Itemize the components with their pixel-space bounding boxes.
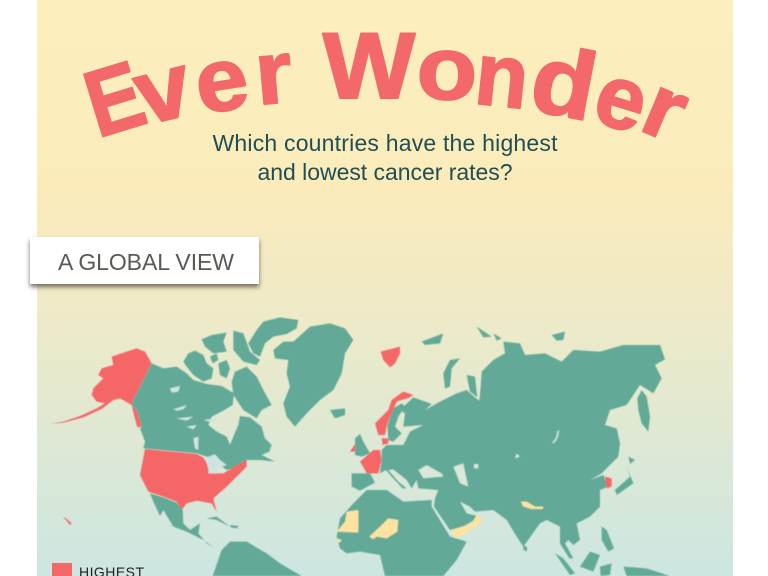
title: Ever Wonder arched letters: e — [584, 43, 660, 152]
Kamchatka peninsula — [637, 390, 650, 432]
Japan — [615, 457, 635, 495]
title: Ever Wonder arched letters: E — [73, 41, 156, 157]
Canada — [132, 363, 275, 470]
Norway — [375, 392, 413, 435]
Arctic islands — [183, 317, 298, 418]
section label: A Global View: A GLOBAL VIEW — [58, 249, 234, 275]
map: Eurasia and Africa — [337, 327, 670, 576]
map: Americas — [50, 317, 375, 576]
Southeast Asia islands — [523, 527, 670, 576]
Caribbean islands — [207, 517, 238, 528]
subtitle — [212, 130, 558, 185]
Spain and Portugal — [352, 473, 375, 491]
legend: highest — [52, 563, 144, 576]
Canadian lakes — [170, 386, 217, 450]
Alaska — [50, 348, 152, 427]
Arctic Russian islands — [422, 327, 565, 397]
Great Britain — [355, 434, 370, 457]
title: Ever Wonder arched letters: r — [629, 54, 703, 161]
Africa — [337, 490, 467, 576]
world map — [50, 317, 670, 576]
Nepal — [521, 502, 543, 509]
section label: A Global View — [30, 237, 259, 284]
Iceland — [330, 408, 345, 418]
Hawaii — [63, 517, 72, 525]
Svalbard — [381, 347, 400, 367]
South America — [213, 542, 302, 576]
title: Ever Wonder arched letters: v — [124, 33, 202, 145]
Greenland — [273, 323, 353, 427]
subtitle: and lowest cancer rates? — [258, 159, 512, 185]
title: Ever Wonder arched letters: r — [251, 22, 296, 124]
title: Ever Wonder arched letters: d — [523, 25, 605, 142]
subtitle: Which countries have the highest — [212, 130, 558, 156]
United States — [140, 449, 247, 512]
Mauritania and Gambia — [337, 510, 358, 543]
title: Ever Wonder arched letters: n — [471, 22, 534, 128]
South Korea — [605, 477, 612, 488]
Yemen — [452, 515, 483, 538]
Ireland — [350, 444, 358, 452]
Mexico and Central America — [150, 493, 215, 548]
Denmark — [382, 438, 388, 445]
title: Ever Wonder arched letters: W — [323, 14, 416, 119]
Niger — [369, 518, 398, 539]
title: Ever Wonder arched letters: e — [188, 27, 255, 133]
title: Ever Wonder arched letters — [73, 14, 703, 161]
Sweden — [387, 403, 405, 442]
Eurasia landmass — [380, 342, 665, 558]
Great Lakes — [203, 454, 227, 473]
France — [360, 450, 382, 473]
Lake Baikal — [553, 431, 558, 443]
title: Ever Wonder arched letters: o — [415, 17, 479, 119]
